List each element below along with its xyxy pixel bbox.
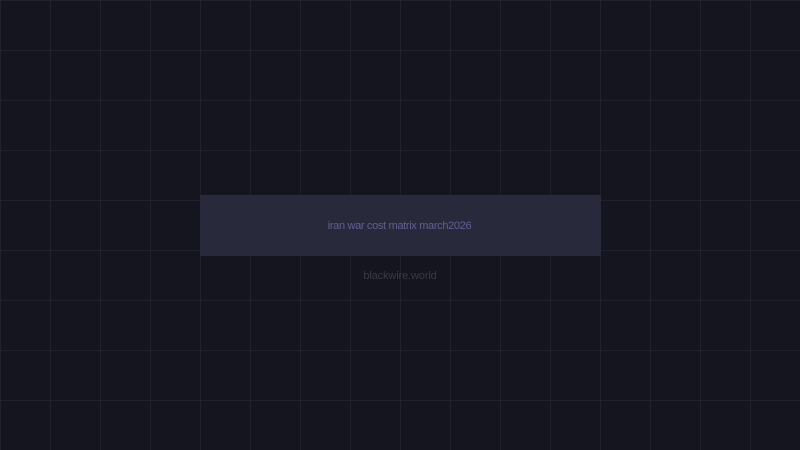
source domain text: blackwire.world — [363, 270, 437, 282]
title text: iran war cost matrix march2026 — [328, 220, 471, 232]
panel: title banner — [200, 195, 601, 256]
